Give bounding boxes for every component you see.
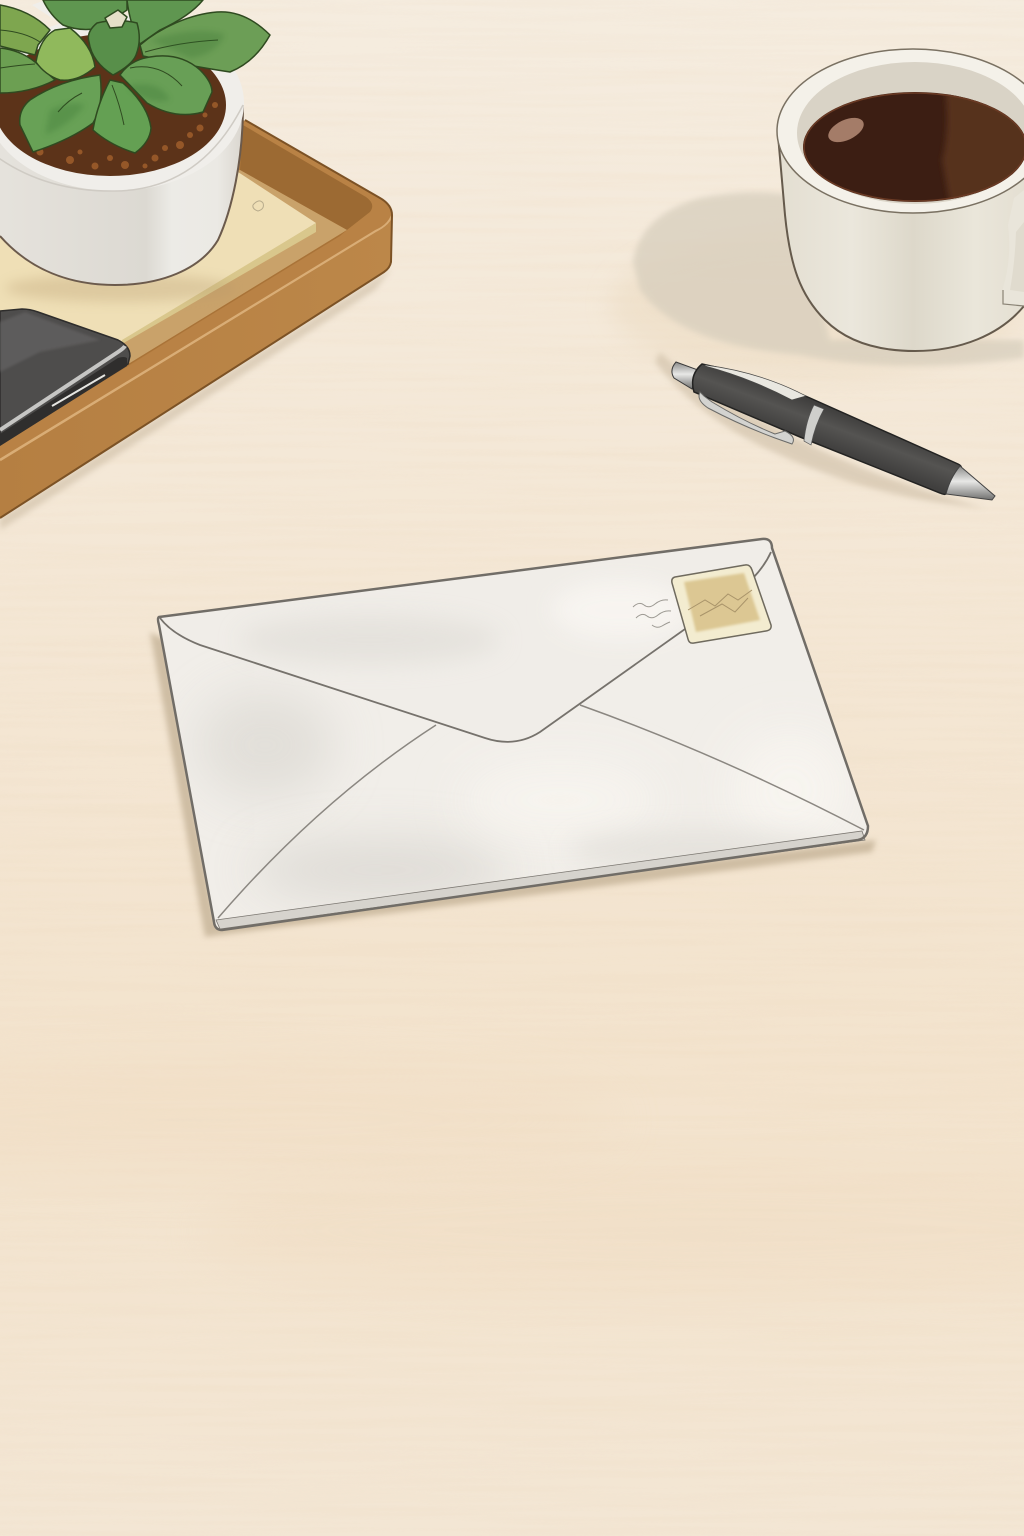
tray rim top [0,120,392,462]
pot rim [0,15,244,191]
potted plant [0,0,270,302]
flap watercolour shading [262,594,668,658]
leaves [0,0,270,153]
leaf: bud tip [105,10,127,28]
leaf: right lower [120,56,212,115]
leaf: far left lower [0,48,55,93]
envelope [150,539,876,937]
envelope flap [160,540,771,742]
pot rim gap behind leaves [32,0,55,20]
tray base shape [0,120,392,518]
leaf: top left [43,0,127,29]
coffee highlight [825,113,867,147]
leaf: bottom left large [20,75,101,152]
pen [655,352,995,508]
leaf shading [45,31,225,135]
paper note in tray [0,172,316,344]
tray front face [0,218,392,518]
leaf: top right small [127,0,203,44]
pen end cap [672,362,698,389]
leaf: bottom centre [93,80,151,153]
soil [0,34,226,176]
tray back wall [240,122,373,230]
cup handle [1003,190,1024,306]
envelope body [158,539,868,930]
cup rim [777,49,1024,213]
cup interior [797,62,1024,204]
leaf: left small light [36,28,95,80]
envelope bottom edge [216,831,865,929]
pen tip [946,466,995,500]
coffee cup shadow [610,192,1024,379]
wooden tray [0,120,392,530]
postage stamp [672,565,771,643]
envelope side fold: left [218,725,436,918]
coffee [800,90,1024,205]
pot body [0,100,243,285]
leaf: far left upper [0,5,50,55]
pen body [693,364,961,494]
tray inner front lip [0,230,347,444]
cup body [778,135,1024,351]
envelope side fold: right [580,705,864,830]
pen ring [804,405,824,445]
envelope watercolour shading [200,694,770,904]
smartphone [0,309,130,446]
pen clip [699,392,793,444]
pen top highlight [705,365,806,400]
envelope shadow [150,632,876,937]
tray floor [0,170,347,363]
leaf: right large [140,12,270,72]
coffee cup [777,49,1024,351]
postmark wavy lines [633,600,671,627]
leaf: centre bud [88,20,139,75]
pot shadow [5,274,235,302]
